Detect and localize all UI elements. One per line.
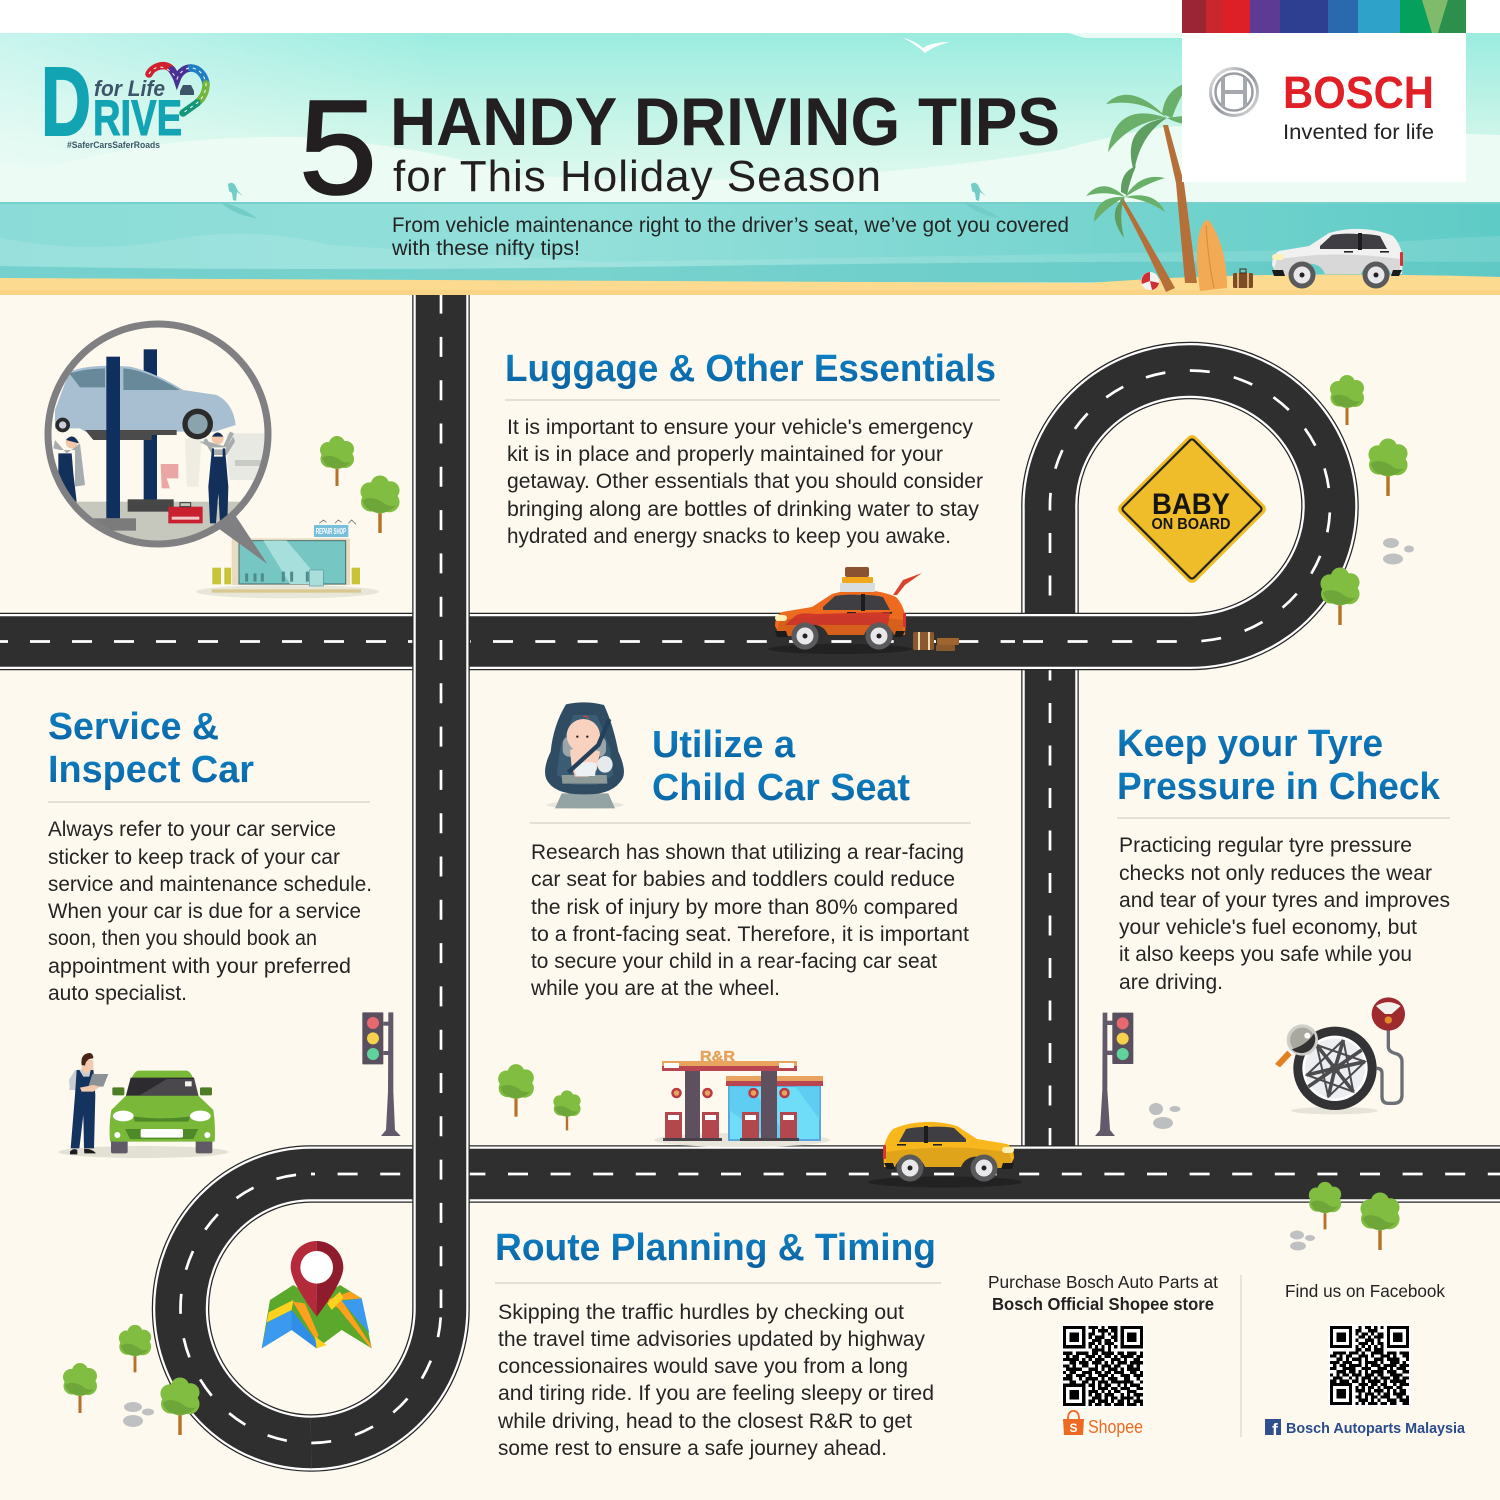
top white strip [0, 0, 1500, 33]
heading: Service & [48, 706, 219, 748]
heading: Pressure in Check [1117, 766, 1441, 808]
trees and rocks: lower right [1290, 1182, 1400, 1250]
text block: while you are at the wheel. [530, 976, 780, 1000]
icon: lens contents [53, 349, 264, 540]
Bosch logo panel [1182, 33, 1466, 182]
illustration: mechanic and green car [58, 1053, 228, 1158]
text block: When your car is due for a service [48, 899, 361, 923]
Bosch colour stripe [1182, 0, 1466, 33]
trees: top left [320, 436, 400, 533]
panel: Shopee store: Purchase Bosch Auto Parts at [988, 1272, 1218, 1292]
trees and rocks: lower left [63, 1325, 200, 1435]
logo: Drive for Life: for Life [94, 76, 165, 101]
heading: Luggage & Other Essentials [505, 348, 996, 390]
heading [652, 724, 910, 809]
illustration: repair shop: REPAIR SHOP [316, 526, 346, 536]
icon: Facebook [1265, 1419, 1281, 1439]
text block: to secure your child in a rear-facing car seat [531, 949, 937, 973]
panel: Shopee store: Bosch Official Shopee store [992, 1294, 1214, 1314]
icon: surfer left [220, 183, 257, 218]
logo: Drive for Life: RIVE [93, 90, 182, 146]
text block: are driving. [1119, 970, 1223, 994]
text block: Practicing regular tyre pressure [1119, 833, 1412, 857]
illustration: R&R station [654, 1049, 830, 1147]
text block: to a front-facing seat. Therefore, it is important [531, 922, 969, 946]
text block: Skipping the traffic hurdles by checking out [498, 1300, 904, 1324]
icon: surfer right [963, 183, 1000, 218]
icon: child car seat [545, 702, 624, 809]
text block: while driving, head to the closest R&R to get [497, 1409, 912, 1433]
text block: checks not only reduces the wear [1119, 861, 1432, 885]
panel: Luggage & Other Essentials [505, 348, 1000, 548]
text block: it also keeps you safe while you [1119, 942, 1412, 966]
icon: mechanic right [199, 432, 235, 523]
text block: kit is in place and properly maintained for your [507, 442, 943, 466]
icon: small palm tree [1086, 166, 1175, 292]
icon: traffic light left [362, 1012, 401, 1136]
icon: white car on beach [1272, 229, 1403, 288]
Bosch logo panel: Invented for life [1283, 120, 1434, 144]
text block: and tear of your tyres and improves [1119, 888, 1450, 912]
panel: Facebook: Find us on Facebook [1285, 1281, 1445, 1301]
icon: baby on board sign: BABY [1152, 488, 1230, 521]
heading: Inspect Car [48, 749, 254, 791]
heading: Route Planning & Timing [495, 1227, 936, 1269]
title: for This Holiday Season [393, 152, 881, 201]
text block: sticker to keep track of your car [48, 845, 340, 869]
text block: hydrated and energy snacks to keep you awake. [507, 524, 951, 548]
heading: Keep your Tyre [1117, 723, 1383, 765]
subtitle: with these nifty tips! [391, 236, 580, 260]
Bosch logo panel: BOSCH [1283, 67, 1434, 118]
heading [1117, 723, 1441, 808]
heading [48, 706, 254, 791]
logo: Drive for Life: D [41, 47, 91, 156]
icon: traffic light right [1095, 1013, 1133, 1136]
rocks beside tyre [1149, 1103, 1180, 1129]
icon: orange car with luggage [768, 567, 959, 654]
text block: the travel time advisories updated by highway [498, 1327, 925, 1351]
text block [497, 1300, 934, 1460]
icon: Shopee bag: S [1069, 1421, 1078, 1435]
text block [1119, 833, 1450, 994]
icon: mechanic [69, 1053, 108, 1154]
icon: tyre pressure gauge [1275, 997, 1405, 1114]
header beach banner [0, 33, 1500, 295]
icon: Shopee bag [1063, 1411, 1084, 1435]
icon: baby on board sign [1116, 433, 1268, 585]
icon: map with location pin [262, 1241, 372, 1348]
panel: Facebook [1265, 1281, 1466, 1439]
text block: soon, then you should book an [48, 926, 317, 950]
title: 5 [299, 74, 377, 222]
icon: green car front [110, 1071, 215, 1153]
icon: mechanic left [53, 436, 85, 502]
title [299, 74, 1060, 222]
icon: yellow car [868, 1122, 1022, 1188]
text block: your vehicle's fuel economy, but [1119, 915, 1417, 939]
illustration: R&R station: R&R [700, 1049, 736, 1065]
text block: car seat for babies and toddlers could reduce [531, 867, 955, 891]
illustration: repair shop [196, 520, 379, 598]
text block: appointment with your preferred [48, 954, 351, 978]
panel: Facebook: Bosch Autoparts Malaysia [1286, 1420, 1466, 1437]
panel: Service & Inspect Car [48, 706, 372, 1005]
icon: seagull [903, 38, 950, 53]
icon: large palm tree [1106, 82, 1215, 283]
text block: auto specialist. [48, 981, 187, 1005]
panel: Keep your Tyre Pressure in Check [1117, 723, 1450, 994]
trees near R&R [498, 1064, 581, 1130]
panel: Utilize a Child Car Seat [530, 702, 971, 1000]
title: HANDY DRIVING TIPS [390, 84, 1060, 160]
text block: some rest to ensure a safe journey ahead. [498, 1436, 887, 1460]
icon: surfboard [1197, 220, 1227, 291]
subtitle [391, 213, 1069, 260]
logo: Drive for Life: #SaferCarsSaferRoads [67, 140, 160, 151]
text block: Always refer to your car service [48, 817, 336, 841]
icon: Facebook: f [1272, 1420, 1278, 1439]
heading: Child Car Seat [652, 767, 910, 809]
text block [48, 817, 372, 1005]
heading: Utilize a [652, 724, 796, 766]
icon: baby on board sign: ON BOARD [1152, 516, 1230, 533]
QR code: Facebook [1328, 1324, 1411, 1407]
text block: getaway. Other essentials that you should consider [507, 469, 983, 493]
text block: and tiring ride. If you are feeling sleepy or tired [498, 1381, 934, 1405]
text block: Research has shown that utilizing a rear-facing [531, 840, 964, 864]
icon: suitcase [1233, 269, 1253, 288]
subtitle: From vehicle maintenance right to the driver’s seat, we’ve got you covered [392, 213, 1069, 237]
icon: beach ball [1141, 272, 1159, 290]
road network [0, 295, 1500, 1443]
icon: Bosch armature [1210, 68, 1258, 116]
logo: Drive for Life [41, 47, 206, 156]
text block [530, 840, 969, 1000]
trees and rocks: top right [1320, 375, 1414, 625]
text block: the risk of injury by more than 80% compared [531, 895, 958, 919]
illustration: repair magnifier [43, 320, 273, 564]
text block: bringing along are bottles of drinking water to stay [507, 497, 979, 521]
text block: service and maintenance schedule. [48, 872, 372, 896]
text block: concessionaires would save you from a long [498, 1354, 908, 1378]
text block [507, 415, 983, 548]
panel: Shopee store: Shopee [1088, 1416, 1143, 1437]
panel: Shopee store [988, 1272, 1218, 1437]
panel: Route Planning & Timing [495, 1227, 941, 1460]
QR code: Shopee [1061, 1324, 1145, 1408]
text block: It is important to ensure your vehicle's emergency [507, 415, 973, 439]
